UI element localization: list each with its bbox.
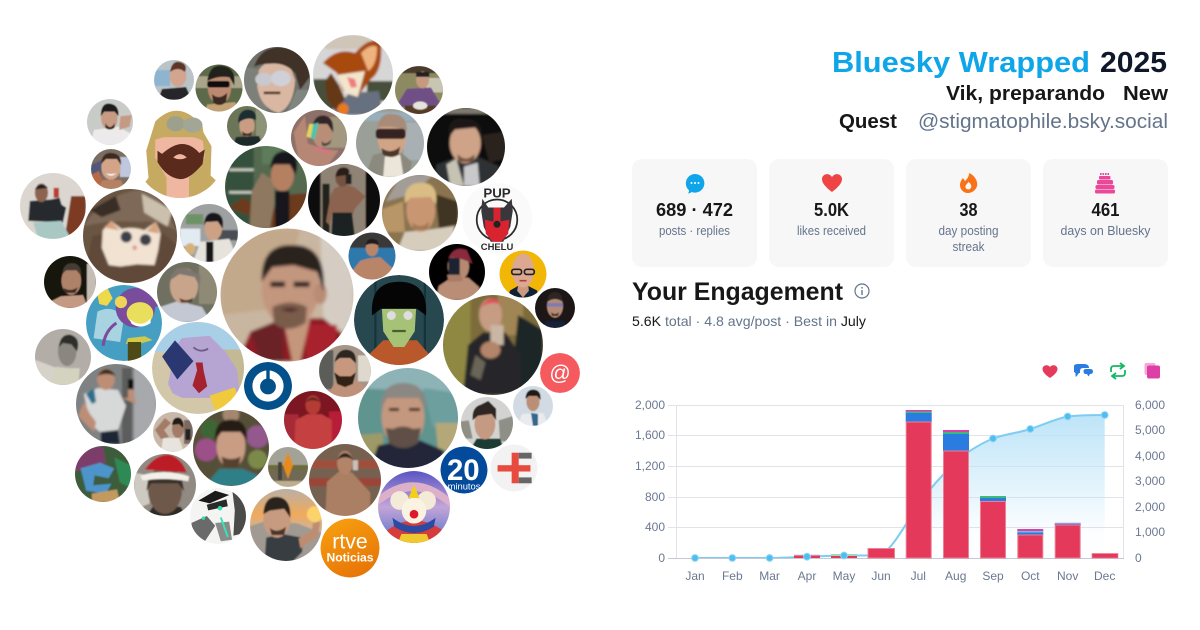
left axis labels: 1,200: [635, 459, 665, 473]
avatar: PUP CHELU logo: [476, 188, 518, 250]
icon: chat bubble with dots: [686, 174, 704, 193]
chart legend: [1042, 363, 1160, 379]
avatar: black and white drawing of face: [190, 488, 246, 544]
panel: days on Bluesky stat: [1043, 159, 1168, 267]
avatar: at sign logo: [540, 353, 580, 393]
icon: legend heart: [1042, 365, 1058, 378]
engagement summary: 5.6K total · 4.8 avg/post · Best in July: [632, 313, 866, 329]
panel: day posting streak stat: streak: [952, 239, 985, 254]
avatar: man with cap: [227, 106, 267, 146]
bar: May: [831, 554, 857, 558]
left axis labels: 400: [645, 520, 665, 534]
display name and handle: @stigmatophile.bsky.social: [918, 111, 1168, 133]
avatar: man in lab coat: [180, 204, 238, 262]
avatar: man on a chair with phone: [20, 173, 86, 239]
avatar: man with santa hat: [134, 454, 196, 516]
bar: Jul: [906, 410, 932, 558]
icon: legend replies: [1074, 364, 1093, 377]
avatar: blue avatar creatures: [75, 446, 131, 502]
avatar: man holding a cat: [225, 146, 307, 228]
panel: likes received stat: [769, 159, 894, 267]
chart: monthly engagement bars with cumulative line: [635, 398, 1165, 583]
title: Bluesky Wrapped: [832, 47, 1090, 79]
avatar: man with glasses and moustache: [244, 47, 310, 113]
avatar: shirtless man in mirror: [308, 164, 380, 236]
panel: days on Bluesky stat: days on Bluesky: [1060, 223, 1151, 238]
right axis labels: 0: [1135, 551, 1142, 565]
avatar: at sign logo: @: [549, 362, 571, 385]
bar: Jun: [868, 548, 894, 558]
bar: Dec: [1092, 554, 1118, 558]
panel: day posting streak stat: [906, 159, 1031, 267]
display name and handle: Vik, preparando: [946, 83, 1105, 105]
avatar: man in dark sweater: [154, 60, 194, 100]
month labels: Mar: [759, 569, 780, 583]
avatar: man with quiff in car: [456, 392, 518, 454]
avatar: blond man: [382, 175, 458, 251]
avatar: man with sunglasses: [196, 64, 242, 112]
panel: day posting streak stat: 38: [960, 199, 978, 220]
right axis labels: 5,000: [1135, 423, 1165, 437]
panel: posts and replies stat: [632, 159, 757, 267]
right axis labels: 2,000: [1135, 500, 1165, 514]
avatar: man in tank top with phone: [153, 412, 193, 452]
display name and handle: New: [1123, 83, 1168, 105]
avatar: black and white portrait: [35, 329, 91, 385]
avatar: cartoon green face character: [354, 275, 444, 365]
avatar: kitten: [83, 189, 177, 283]
panel: avatar bubble cluster: [13, 27, 580, 577]
avatar: smiling man: [91, 149, 131, 189]
avatar: grey man with shaved side: [157, 262, 217, 322]
icon: cake: [1095, 173, 1115, 194]
icon: info: [855, 284, 869, 298]
title: 2025: [1100, 47, 1167, 79]
month labels: [685, 569, 1115, 583]
panel: posts and replies stat: posts · replies: [659, 223, 730, 238]
display name and handle: Quest: [839, 111, 897, 133]
avatar: man with peace sign: [87, 99, 133, 145]
month labels: Sep: [982, 569, 1004, 583]
avatar: rainbow light on chest: [291, 110, 347, 166]
avatar: grey haired man by the sea: [348, 358, 468, 478]
avatar: 20 minutos logo: [440, 446, 488, 494]
avatar: bald man with sunglasses: [356, 109, 424, 177]
avatar: plus E logo: [490, 444, 538, 492]
avatar: man with coffee: [395, 66, 443, 114]
avatar: man at sunset: [243, 482, 329, 568]
right axis labels: 4,000: [1135, 449, 1165, 463]
bar: Sep: [980, 496, 1006, 558]
avatar: red lit shirtless man: [278, 385, 348, 455]
avatar: fox character: [313, 35, 393, 115]
month labels: Dec: [1094, 569, 1115, 583]
avatar: ditto character with book and tie: [152, 322, 244, 414]
avatar: cartoon bald man on yellow: [500, 250, 546, 298]
panel: days on Bluesky stat: 461: [1092, 199, 1120, 220]
avatar: orange reflection landscape: [268, 447, 308, 487]
avatar: man with red cap and phone: [429, 244, 485, 300]
month labels: Feb: [722, 569, 743, 583]
stacked bars: [794, 410, 1118, 558]
avatar: man among flowers: [193, 410, 269, 486]
avatar: purple monkey character: [86, 285, 162, 361]
display name and handle: [839, 83, 1168, 133]
avatar: shirtless man on black background: [44, 256, 96, 308]
avatar: rtve Noticias logo: [320, 518, 380, 578]
panel: likes received stat: likes received: [797, 223, 866, 238]
avatar: doctor: [509, 382, 557, 430]
right axis labels: 3,000: [1135, 474, 1165, 488]
month labels: Nov: [1057, 569, 1078, 583]
avatar: man with pink hair in elevator: [443, 295, 543, 395]
line markers: [692, 412, 1108, 561]
left axis labels: 2,000: [635, 398, 665, 412]
avatar: dark haired man in jacket: [427, 108, 505, 186]
month labels: Apr: [798, 569, 816, 583]
right axis labels: 6,000: [1135, 398, 1165, 412]
avatar: blue ring logo: [244, 362, 292, 410]
bar: Aug: [943, 430, 969, 558]
icon: legend quotes: [1144, 363, 1160, 378]
month labels: Aug: [945, 569, 966, 583]
avatar: main profile man in plaid shirt: [220, 228, 354, 362]
heading: your engagement: Your Engagement: [632, 278, 844, 306]
cumulative line: [695, 415, 1105, 558]
avatar: bearded man shirtless: [314, 340, 376, 402]
month labels: Jun: [871, 569, 891, 583]
cumulative area: [695, 415, 1105, 558]
avatar: man in pool: [348, 232, 396, 280]
bar: Nov: [1055, 522, 1081, 558]
icon: heart: [822, 174, 842, 192]
month labels: May: [833, 569, 855, 583]
left axis labels: 1,600: [635, 428, 665, 442]
icon: legend reposts: [1111, 363, 1125, 379]
left axis labels: [635, 398, 665, 565]
month labels: Jan: [685, 569, 705, 583]
left axis labels: 0: [658, 551, 665, 565]
bar: Apr: [794, 554, 820, 558]
panel: likes received stat: 5.0K: [814, 199, 850, 220]
panel: day posting streak stat: day posting: [938, 223, 998, 238]
right axis labels: [1135, 398, 1165, 565]
avatar: man in gym mirror: [76, 364, 156, 444]
avatar: clown plush on rainbow: [378, 471, 450, 543]
avatar: man with glasses on black: [535, 288, 575, 328]
bar: Oct: [1017, 529, 1043, 558]
month labels: Jul: [911, 569, 926, 583]
avatar: 20 minutos logo: 20: [447, 454, 480, 487]
avatar: shirtless man in striped room: [302, 437, 388, 523]
month labels: Oct: [1021, 569, 1040, 583]
panel: posts and replies stat: 689 · 472: [656, 199, 733, 220]
left axis labels: 800: [645, 490, 665, 504]
right axis labels: 1,000: [1135, 525, 1165, 539]
avatar: bearded cartoon with hood and goggles: [146, 110, 216, 198]
icon: flame: [960, 173, 977, 193]
